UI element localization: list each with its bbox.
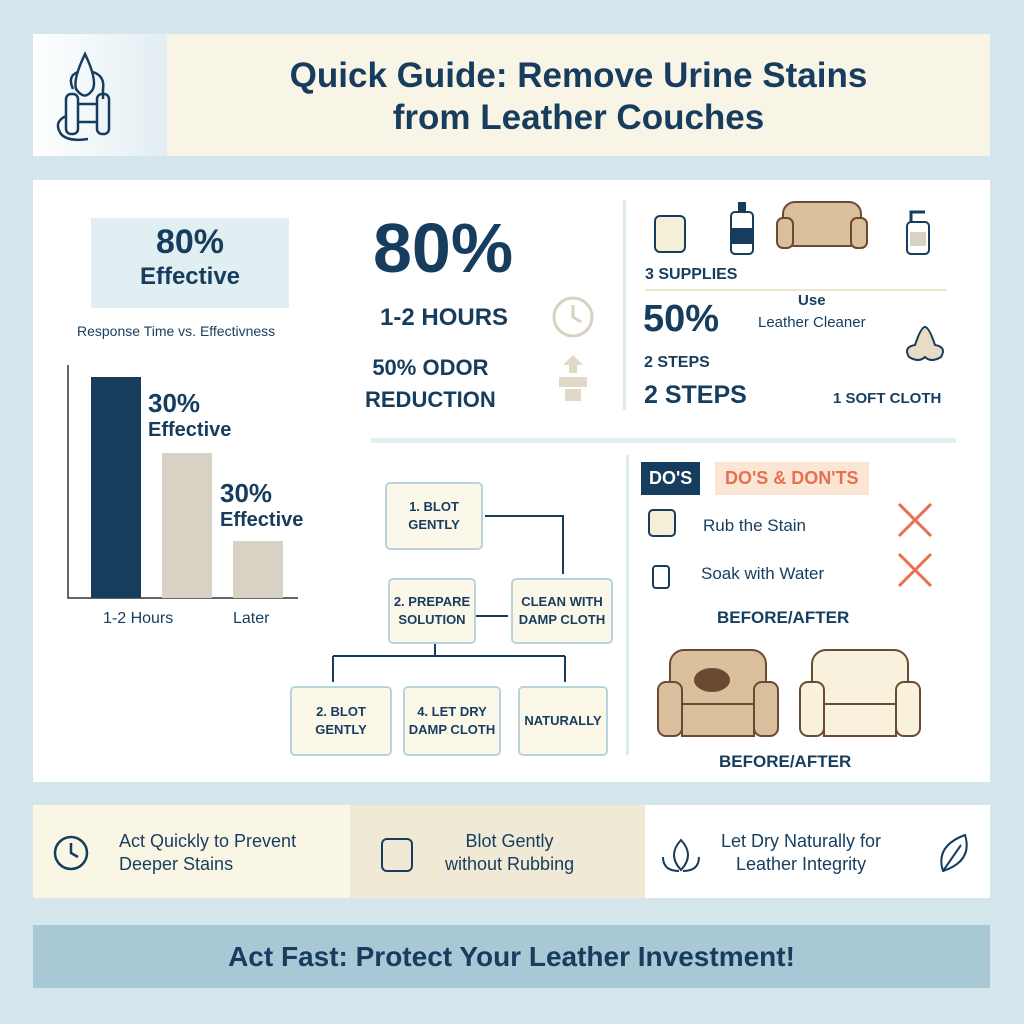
flowchart: GENTLY (315, 722, 367, 737)
label: 2 steps big: 2 STEPS (644, 381, 747, 409)
tip 2: Blot Gently (466, 831, 554, 851)
icon: arrows (559, 355, 587, 401)
bar chart: 30% (220, 478, 272, 508)
bar chart: 30% (148, 388, 200, 418)
tip 1 (33, 805, 350, 898)
bar chart: Later (233, 610, 269, 627)
flowchart: 2. PREPARE (394, 594, 470, 609)
flowchart: CLEAN WITH (521, 594, 603, 609)
stat box: 80% effective (91, 218, 289, 308)
tip 3 (662, 831, 968, 874)
do's and don'ts: Soak with Water (701, 564, 824, 583)
flowchart: SOLUTION (398, 612, 466, 627)
tips strip (33, 805, 990, 898)
flowchart: DAMP CLOTH (409, 722, 495, 737)
icon: clock (552, 296, 594, 338)
tip 1: Act Quickly to Prevent (119, 831, 296, 851)
stat: 1-2 hours: 1-2 HOURS (380, 304, 508, 331)
flowchart: 2. BLOT (316, 704, 366, 719)
big stat: 80%: 80% (373, 209, 513, 287)
stat: odor reduction: 50% ODOR (372, 355, 488, 380)
footer banner: Act Fast: Protect Your Leather Investment! (228, 941, 795, 972)
bar chart: Effective (148, 419, 231, 441)
tip 3: Leather Integrity (736, 854, 866, 874)
bar chart: Effective (220, 509, 303, 531)
title: from Leather Couches (393, 98, 764, 137)
footer banner (33, 925, 990, 988)
divider vertical (623, 200, 626, 410)
flowchart: DAMP CLOTH (519, 612, 605, 627)
chart title: Response Time vs. Effectivness (77, 323, 275, 339)
tip 1: Deeper Stains (119, 854, 233, 874)
tip 2: without Rubbing (445, 854, 574, 874)
do's and don'ts (641, 462, 932, 771)
flowchart: NATURALLY (524, 713, 602, 728)
tip 2 (350, 805, 645, 898)
bar chart: 1-2 Hours (103, 610, 173, 627)
stat: odor reduction: REDUCTION (365, 387, 496, 412)
divider vertical 2 (626, 455, 629, 755)
do's and don'ts: Rub the Stain (703, 516, 806, 535)
text: use leather cleaner: Leather Cleaner (758, 314, 866, 331)
do's and don'ts: BEFORE/AFTER (717, 608, 849, 627)
stat box: 80% effective: Effective (140, 263, 240, 290)
do's and don'ts: BEFORE/AFTER (719, 752, 851, 771)
title: Quick Guide: Remove Urine Stains (290, 56, 867, 95)
do's and don'ts: DO'S (649, 468, 692, 488)
stat: 50%: 50% (643, 298, 719, 340)
label: 1 soft cloth: 1 SOFT CLOTH (833, 390, 941, 407)
flowchart (290, 482, 613, 756)
stat box: 80% effective: 80% (156, 223, 224, 261)
icon: couch with drop (33, 34, 167, 156)
bar chart (67, 365, 303, 627)
flowchart: 4. LET DRY (417, 704, 487, 719)
flowchart: 1. BLOT (409, 499, 459, 514)
flowchart: GENTLY (408, 517, 460, 532)
main panel (33, 180, 990, 782)
title (290, 56, 867, 137)
do's and don'ts: DO'S & DON'TS (725, 468, 859, 488)
supplies icons (654, 201, 930, 255)
text: use leather cleaner (758, 292, 866, 331)
header (33, 34, 990, 156)
label: 2 steps small: 2 STEPS (644, 354, 710, 371)
stat: odor reduction (365, 355, 496, 412)
icon: nose (906, 326, 944, 361)
label: 3 supplies: 3 SUPPLIES (645, 266, 737, 283)
text: use leather cleaner: Use (798, 292, 826, 309)
tip 3: Let Dry Naturally for (721, 831, 881, 851)
